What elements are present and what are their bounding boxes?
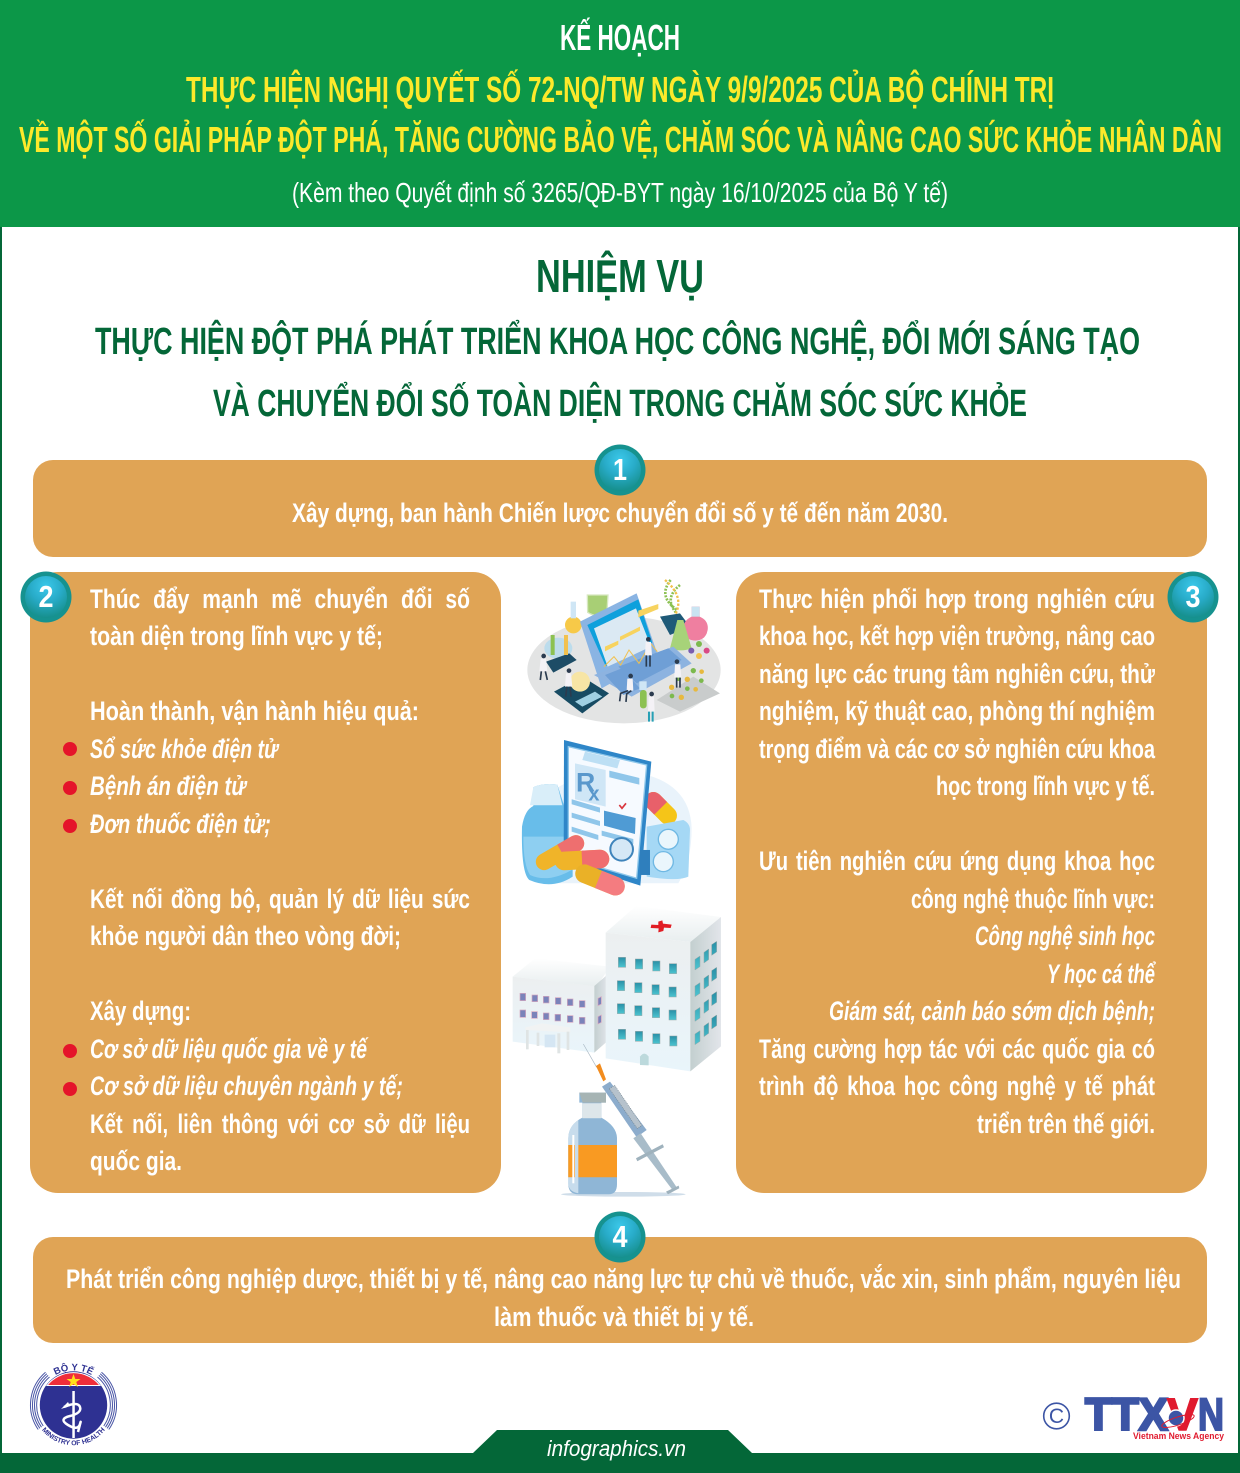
header banner [0,0,1240,227]
seal rings [30,1372,117,1430]
task 2 text: Kết nối đồng bộ, quản lý dữ liệu sức [90,884,470,914]
icon: hospital buildings [513,906,721,1071]
badge: 3: 3 [1186,579,1200,614]
heading: nhiệm vụ: NHIỆM VỤ [536,250,704,302]
logo: TTXVN: V [1167,1389,1198,1440]
logo: TTXVN: TTX [1085,1389,1168,1440]
section heading [95,250,1140,425]
copyright symbol: C [1049,1405,1064,1428]
badge: 4 [594,1212,646,1262]
website: infographics.vn [547,1436,686,1461]
logo: TTXVN: N [1198,1389,1224,1440]
panel: task 1 [33,460,1207,557]
badge: 1: 1 [613,452,627,487]
task 2 text: Hoàn thành, vận hành hiệu quả: [90,696,419,726]
task 2 text: Bệnh án điện tử [90,771,248,801]
logo: TTXVN [1085,1389,1225,1442]
copyright symbol [1044,1403,1069,1429]
logo: ministry of health: MINISTRY OF HEALTH [42,1427,105,1446]
task 2 text: toàn diện trong lĩnh vực y tế; [90,621,383,651]
icon: science laboratory on laptop [527,580,721,723]
task 2 text: quốc gia. [90,1146,182,1176]
icon: prescription clipboard and medicines: R [576,767,595,797]
panel: task 4 [33,1237,1207,1343]
task 2 text: Cơ sở dữ liệu chuyên ngành y tế; [90,1071,403,1101]
agency caption: Vietnam News Agency [1133,1431,1225,1442]
task 3 text [759,584,1156,1139]
footer tab [473,1430,752,1461]
red bullets [63,742,77,1096]
badge: 2 [20,572,72,622]
icon: prescription clipboard and medicines [522,740,692,898]
task 2 text: Cơ sở dữ liệu quốc gia về y tế [90,1034,369,1064]
task 2 text: khỏe người dân theo vòng đời; [90,921,401,951]
task 4 text [66,1263,1181,1332]
badge: 3 [1168,572,1218,622]
title: kế hoạch: KẾ HOẠCH [560,17,680,58]
task 1 text: Xây dựng, ban hành Chiến lược chuyển đổi số y tế đến năm 2030. [292,498,948,528]
panel: task 3 [736,572,1207,1193]
task 4 text: làm thuốc và thiết bị y tế. [494,1302,754,1332]
task 2 text [90,584,470,1176]
task 3 text: công nghệ thuộc lĩnh vực: [911,884,1155,914]
task 2 text: Đơn thuốc điện tử; [90,809,271,839]
icon: prescription clipboard and medicines: x [588,783,599,805]
badge: 4: 4 [612,1219,628,1254]
star [66,1374,80,1387]
task 3 text: học trong lĩnh vực y tế. [936,771,1155,801]
badge: 1 [594,444,646,496]
logo: ministry of health [30,1362,118,1446]
task 3 text: Y học cá thể [1047,959,1156,989]
task 3 text: Công nghệ sinh học [975,921,1155,951]
task 2 text: Thúc đẩy mạnh mẽ chuyển đổi số [90,584,470,614]
subtitle: (Kèm theo Quyết định số 3265/QĐ-BYT ngày 16/10/2025 của Bộ Y tế) [292,177,948,208]
task 2 text: Xây dựng: [90,996,191,1026]
task 2 text: Sổ sức khỏe điện tử [90,734,280,764]
panel: task 2 [30,572,501,1193]
task 3 text: triển trên thế giới. [977,1109,1155,1139]
logo: ministry of health: BỘ Y TẾ [53,1362,95,1375]
icon: vaccine vial and syringe [561,1044,686,1197]
badge: 2: 2 [38,579,54,614]
task 2 text: Kết nối, liên thông với cơ sở dữ liệu [90,1109,470,1139]
